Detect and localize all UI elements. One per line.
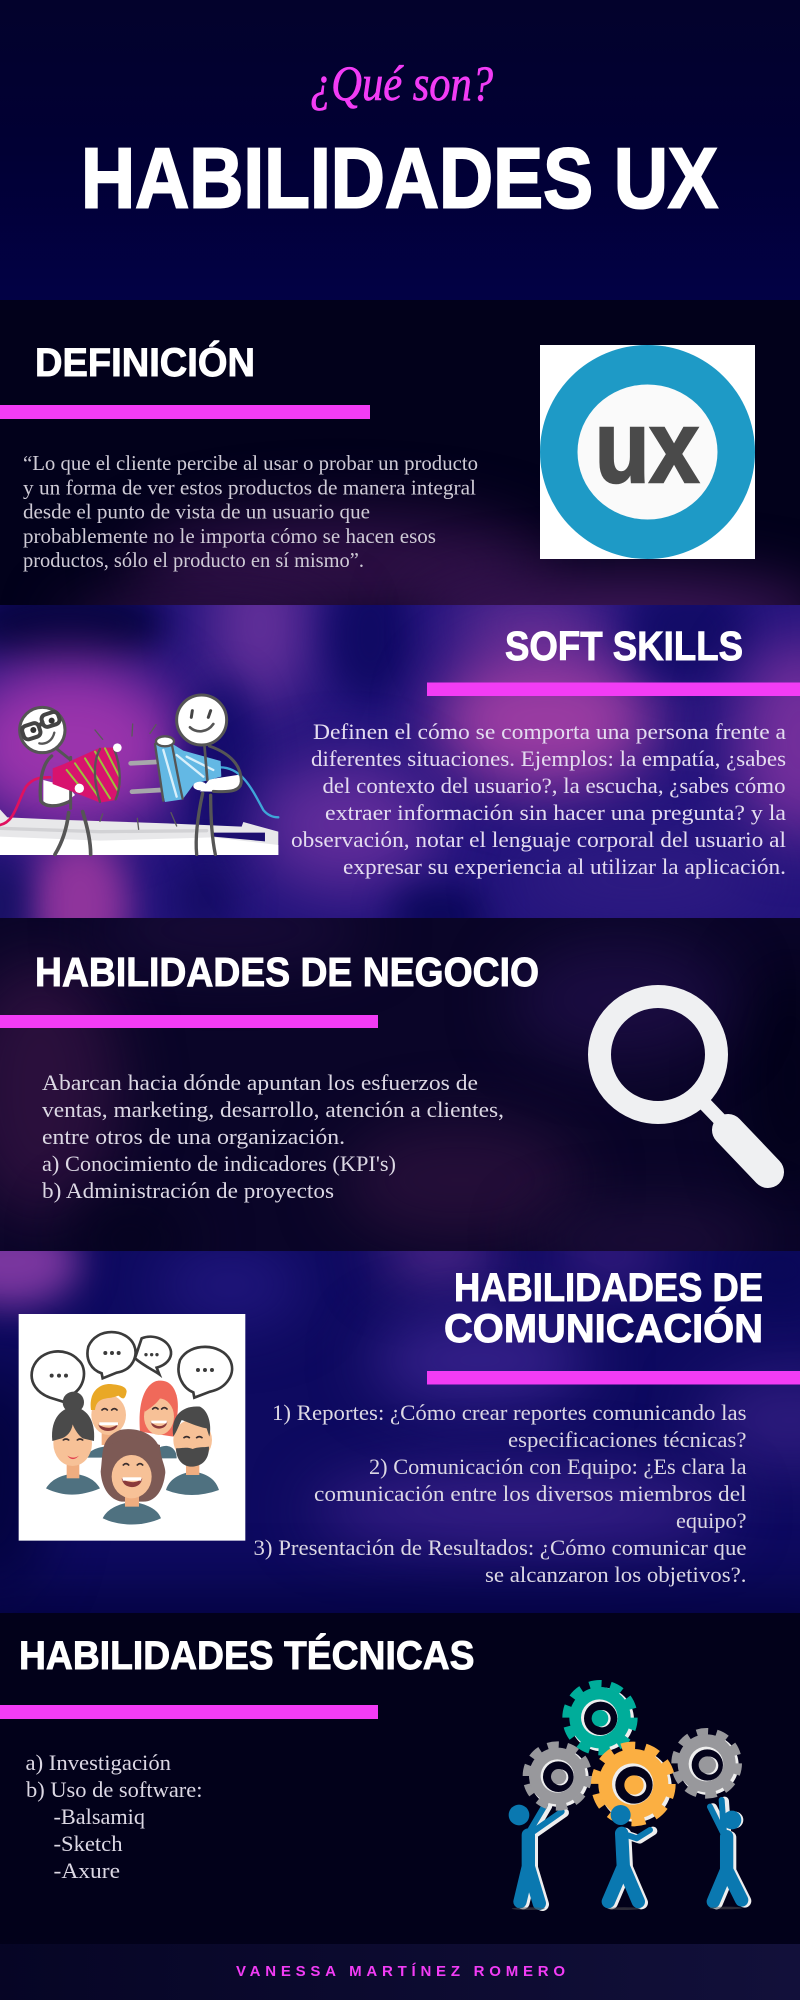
heading: DEFINICIÓN [35,339,255,385]
text block: productos, sólo el producto en sí mismo”. [23,548,364,572]
accent bar [0,405,370,419]
text block: probablemente no le importa cómo se hacen esos [23,524,436,548]
text block: diferentes situaciones. Ejemplos: la empatía, ¿sabes [311,746,786,771]
subtitle: ¿Qué son? [310,55,493,111]
text block: a) Conocimiento de indicadores (KPI's) [42,1151,396,1176]
text block [291,719,786,879]
text block: “Lo que el cliente percibe al usar o probar un producto [23,451,478,475]
icon: magnifying glass [600,996,768,1172]
text block: entre otros de una organización. [42,1124,345,1149]
accent bar [0,1705,378,1719]
text block [254,1400,747,1587]
gear: gray right [675,1731,739,1795]
title: HABILIDADES UX [81,132,718,226]
text block: -Balsamiq [54,1804,145,1829]
text block: -Axure [54,1858,120,1883]
text block: 3) Presentación de Resultados: ¿Cómo comunicar que [254,1535,746,1560]
icon: people lifting gears [509,1684,745,1910]
icon: team with speech bubbles [19,1314,245,1541]
accent bar [0,1015,378,1028]
author credit: VANESSA MARTÍNEZ ROMERO [236,1963,565,1980]
icon: UX logo [540,345,755,559]
panel: habilidades técnicas [0,1613,800,1944]
heading: HABILIDADES DE [454,1266,763,1310]
heading [444,1266,763,1351]
icon: UX logo: ux [595,390,699,504]
heading: HABILIDADES TÉCNICAS [19,1633,474,1678]
text block: observación, notar el lenguaje corporal del usuario al [291,827,786,852]
text block: Abarcan hacia dónde apuntan los esfuerzos de [42,1070,478,1095]
text block: ventas, marketing, desarrollo, atención a clientes, [42,1097,504,1122]
gear: orange [595,1746,672,1822]
text block: expresar su experiencia al utilizar la aplicación. [343,854,786,879]
text block [42,1070,504,1203]
accent bar [427,1371,800,1384]
text block: equipo? [676,1508,746,1533]
text block: 1) Reportes: ¿Cómo crear reportes comunicando las [272,1400,746,1425]
icon: stick figures with plug [0,695,278,855]
text block: 2) Comunicación con Equipo: ¿Es clara la [369,1454,747,1479]
text block: extraer información sin hacer una pregunta? y la [325,800,786,825]
text block [23,451,478,572]
text block: Definen el cómo se comporta una persona frente a [313,719,786,744]
gear: teal [566,1684,634,1752]
heading: HABILIDADES DE NEGOCIO [35,949,539,995]
text block: comunicación entre los diversos miembros del [314,1481,746,1506]
text block: b) Uso de software: [26,1777,202,1802]
text block: se alcanzaron los objetivos?. [485,1562,746,1587]
panel: habilidades de comunicación [0,1251,800,1613]
text block: b) Administración de proyectos [42,1178,334,1203]
text block: del contexto del usuario?, la escucha, ¿sabes cómo [322,773,786,798]
accent bar [427,682,800,696]
heading: SOFT SKILLS [505,623,743,669]
panel: habilidades de negocio [0,918,800,1251]
panel: hero [0,0,800,300]
heading: COMUNICACIÓN [444,1305,763,1351]
text block: -Sketch [54,1831,122,1856]
text block [26,1750,202,1883]
text block: a) Investigación [26,1750,171,1775]
panel: soft skills [0,605,800,918]
panel: footer [0,1944,800,2000]
panel: definición [0,340,800,605]
text block: desde el punto de vista de un usuario que [23,500,370,524]
text block: y un forma de ver estos productos de manera integral [23,476,476,500]
gear: gray left [526,1745,589,1807]
text block: especificaciones técnicas? [508,1427,746,1452]
